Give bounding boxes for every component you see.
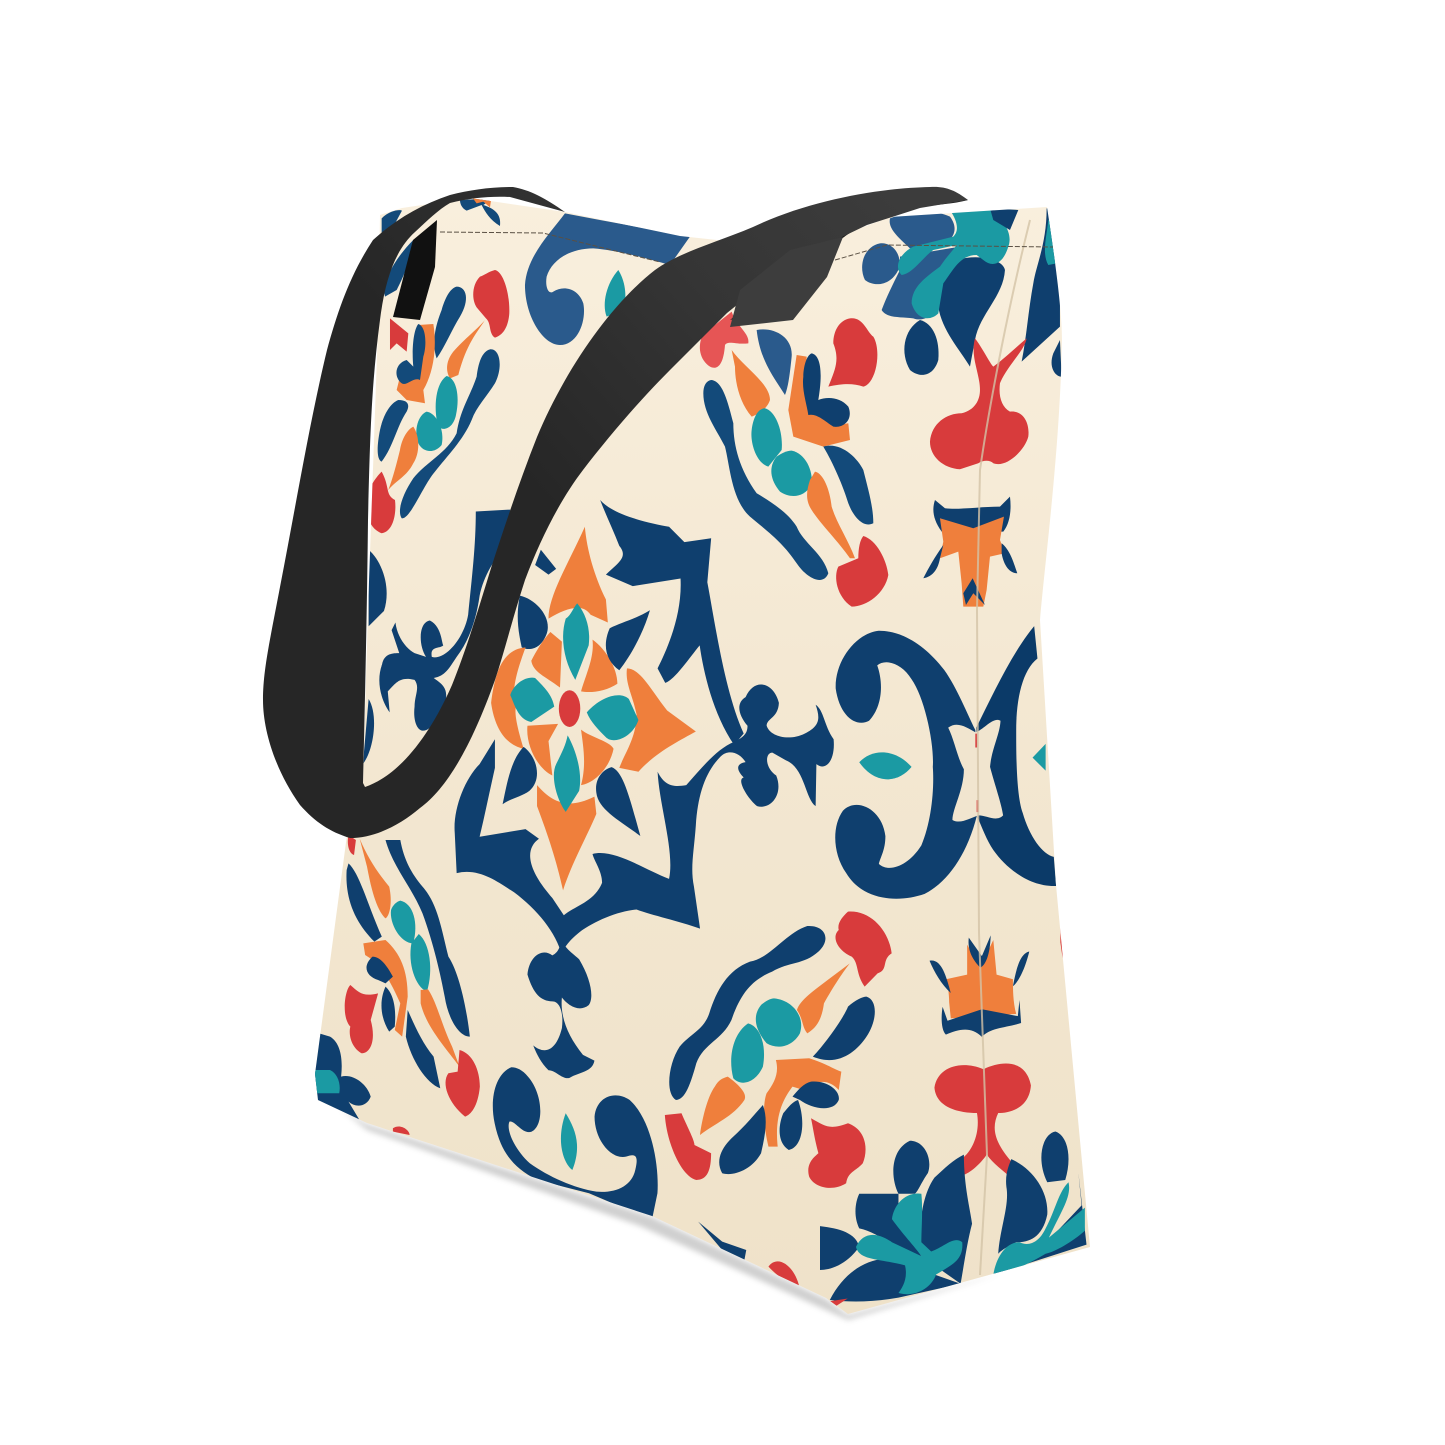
ground shadow — [340, 1108, 1000, 1320]
navy leaves — [366, 957, 440, 1088]
orange petal — [447, 320, 485, 378]
navy oval — [862, 243, 900, 284]
left half circle upper — [369, 550, 387, 626]
teal drop — [605, 270, 625, 317]
bottom floral teal left — [856, 1194, 962, 1294]
bag pattern — [308, 196, 1087, 1307]
red flower right — [828, 318, 877, 387]
lower red ornament — [934, 1064, 1031, 1178]
orange star bottom petal — [537, 785, 596, 890]
orange petal — [732, 350, 770, 417]
left strap stitched tab — [393, 220, 437, 320]
red slivers — [975, 734, 979, 812]
red sliver at edge — [1060, 926, 1063, 958]
navy behind tab — [384, 240, 413, 297]
red left flower — [345, 985, 378, 1053]
small bottom red mark — [768, 1261, 800, 1290]
orange lower petal — [807, 472, 855, 558]
lower centre teal lobes — [731, 998, 801, 1083]
navy wave — [703, 380, 828, 580]
red sliver — [348, 835, 356, 855]
right scroll — [976, 626, 1056, 886]
small orange petals — [527, 632, 617, 785]
gusset fold line — [977, 220, 1030, 1275]
small red mark — [393, 1127, 410, 1135]
navy leaf shape — [396, 324, 425, 384]
lower centre red top flower — [835, 912, 892, 987]
upper centre and right pattern — [700, 207, 1062, 607]
crest navy band — [933, 497, 1011, 532]
bottom floral navy shapes — [820, 1141, 972, 1301]
teal petals — [510, 603, 638, 812]
teal right leaf — [1033, 744, 1046, 771]
lower centre navy wave — [669, 926, 825, 1100]
tote bag illustration — [262, 186, 1090, 1322]
right strap stitched tab — [730, 237, 843, 327]
teal lobe two — [771, 451, 812, 496]
frame top arm — [600, 500, 744, 745]
orange star right petal — [619, 668, 696, 772]
red lower flower — [371, 472, 396, 534]
navy wave — [400, 349, 500, 518]
teal lobe one — [436, 376, 458, 429]
left fleur — [379, 510, 510, 731]
navy teardrops — [503, 610, 650, 836]
left scroll — [835, 631, 977, 899]
lower centre navy leaves — [719, 1081, 839, 1174]
navy right strip — [1022, 208, 1060, 362]
orange leaf shape — [397, 324, 435, 403]
lower fleur — [527, 940, 594, 1078]
top left navy — [382, 210, 402, 233]
bottom floral navy right — [993, 1131, 1087, 1275]
navy outer stem — [386, 840, 470, 1037]
navy left stem — [346, 863, 382, 942]
orange upper petal — [360, 838, 391, 918]
teal lobe two — [416, 412, 442, 451]
navy upper blob — [890, 212, 955, 248]
teal lobe one — [751, 408, 782, 467]
bag body — [315, 198, 1090, 1314]
lower crest claws — [930, 952, 1029, 993]
crest left claw — [923, 545, 943, 578]
small top ornament — [460, 198, 500, 226]
navy leaf shape — [803, 353, 850, 427]
navy piece beside strap — [535, 550, 556, 575]
top scroll — [525, 213, 690, 345]
navy top corner — [990, 208, 1018, 230]
red centre — [559, 690, 580, 727]
lower centre orange leaf shape — [764, 1058, 841, 1147]
teal right strip — [1045, 217, 1057, 265]
red flower — [446, 1050, 480, 1117]
lower centre orange petal — [797, 963, 850, 1033]
navy spoon — [434, 287, 466, 358]
navy right spoon — [823, 446, 873, 524]
lower centre red lower flower — [665, 1113, 711, 1180]
lower crest orange — [946, 940, 1016, 1018]
corner teal floral — [308, 1070, 340, 1093]
strap — [263, 187, 968, 838]
lower left and lower centre pattern — [308, 835, 892, 1290]
small top ornament orange — [473, 198, 491, 208]
navy spoon — [757, 329, 792, 395]
cream butterfly — [948, 720, 1003, 822]
hem stitching — [440, 232, 1053, 262]
navy lower spoon — [378, 400, 408, 462]
lower centre navy spoon — [813, 997, 875, 1060]
orange leaf shape — [363, 940, 408, 1037]
left half circle lower — [363, 699, 374, 764]
navy lower oval — [904, 320, 939, 375]
orange leaf shape — [788, 355, 850, 447]
orange carrot petal — [421, 989, 460, 1067]
orange star left petal — [491, 647, 526, 749]
crest orange — [940, 517, 1005, 607]
strap dark underside — [730, 197, 968, 320]
navy mid blob — [882, 247, 960, 319]
red mirrored ornament — [930, 338, 1029, 469]
lower crest base — [942, 1000, 1021, 1037]
lower crest chevron — [969, 935, 991, 968]
red flower — [473, 270, 509, 338]
orange star top petal — [549, 527, 608, 622]
navy far right oval — [1052, 340, 1062, 377]
lower centre orange petal two — [700, 1077, 745, 1135]
small bottom navy mark — [698, 1222, 746, 1260]
navy big leaf — [938, 257, 1005, 367]
teal leaf — [859, 752, 912, 779]
orange lower petal — [388, 427, 418, 490]
crest right claw — [1002, 543, 1017, 573]
frame lower arms and right fleur — [455, 684, 834, 955]
navy ball — [518, 596, 548, 649]
top right floral cluster — [862, 207, 1062, 377]
lower right pattern — [820, 626, 1087, 1307]
teal bottom drop — [561, 1113, 577, 1170]
red flower under strap — [700, 312, 748, 368]
teal lobes — [391, 901, 430, 992]
red upper leaf — [390, 318, 408, 352]
upper left pattern — [367, 196, 690, 533]
red lower flower — [836, 536, 888, 607]
bottom floral teal right — [993, 1182, 1085, 1275]
lower centre red right flower — [808, 1118, 866, 1188]
bottom scroll — [493, 1067, 658, 1220]
corner navy floral — [308, 1030, 371, 1123]
central medallion — [363, 500, 834, 1078]
teal floral — [898, 207, 1010, 318]
crest chevron — [963, 578, 985, 605]
bottom red sliver — [823, 1299, 848, 1307]
